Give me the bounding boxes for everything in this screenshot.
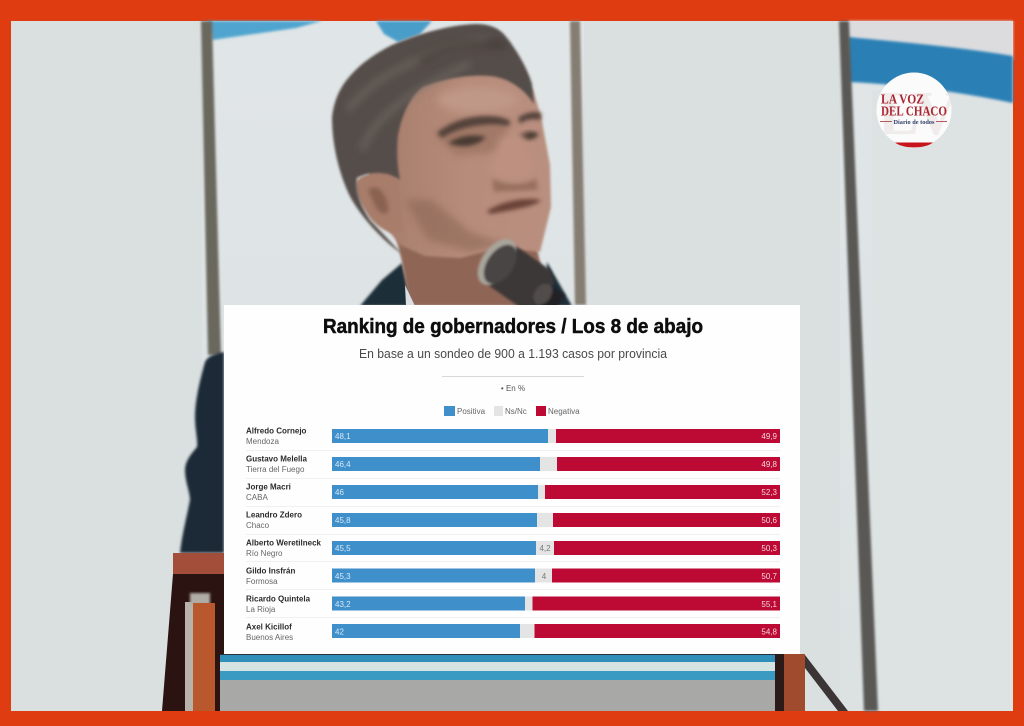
podium left top [173, 553, 224, 574]
row: Alfredo Cornejo: Alfredo Cornejo [246, 426, 307, 436]
eye right [518, 132, 539, 140]
legend: Ns/Nc [505, 407, 527, 416]
chart panel [224, 305, 800, 654]
chart title: Ranking de gobernadores / Los 8 de abajo [323, 316, 703, 338]
eyebrow right [518, 112, 541, 124]
flag fragment top centre [376, 21, 432, 42]
row: Leandro Zdero: 45,8 [335, 516, 351, 525]
row: Gildo Insfrán: 50,7 [761, 572, 778, 581]
nose [490, 132, 536, 180]
row: Ricardo Quintela: 43,2 [335, 600, 351, 609]
podium right side [784, 654, 805, 711]
face [368, 68, 551, 258]
flag pole left [201, 21, 221, 355]
eyebrow left [437, 116, 511, 138]
row: Jorge Macri: 46 [335, 488, 344, 497]
row: Alfredo Cornejo [246, 426, 780, 446]
podium front stripes [220, 654, 776, 711]
collar [405, 285, 415, 306]
legend [444, 406, 580, 416]
row: Alberto Weretilneck: 50,3 [761, 544, 778, 553]
ear inner [368, 187, 388, 214]
mouth [487, 199, 541, 214]
row: Axel Kicillof: Buenos Aires [246, 633, 293, 642]
row: Axel Kicillof: Axel Kicillof [246, 622, 292, 632]
logo disc [876, 72, 952, 148]
logo name: LA VOZ [881, 92, 924, 106]
row: Alberto Weretilneck: Río Negro [246, 549, 283, 558]
row: Gustavo Melella: 49,8 [761, 460, 778, 469]
legend: Positiva [457, 407, 486, 416]
podium light slab [185, 602, 193, 711]
coat shoulders [360, 262, 572, 306]
nostril shadow [492, 178, 538, 192]
row: Alfredo Cornejo: 49,9 [761, 432, 778, 441]
microphone [470, 232, 573, 326]
eye left [448, 135, 486, 146]
panel background [224, 305, 800, 654]
row: Ricardo Quintela: Ricardo Quintela [246, 594, 311, 604]
row: Alberto Weretilneck: 4,2 [539, 544, 551, 553]
logo name second line: DEL CHACO [881, 104, 947, 118]
row: Alberto Weretilneck [246, 538, 780, 558]
flag pole right [839, 21, 878, 711]
row: Ricardo Quintela [246, 594, 780, 614]
row: Jorge Macri [246, 482, 780, 502]
logo watermark: LV [878, 80, 958, 148]
row: Alberto Weretilneck: 45,5 [335, 544, 351, 553]
row: Axel Kicillof: 42 [335, 628, 344, 636]
row: Jorge Macri: CABA [246, 493, 268, 502]
row: Leandro Zdero: Chaco [246, 521, 270, 530]
row: Leandro Zdero [246, 510, 780, 530]
row: Jorge Macri: Jorge Macri [246, 482, 291, 492]
hair highlights [348, 40, 488, 150]
podium [162, 553, 848, 711]
flag pole centre [570, 21, 586, 305]
podium orange slab [193, 603, 215, 711]
row: Gildo Insfrán: Formosa [246, 577, 278, 586]
flag top left [208, 21, 322, 40]
logo rule right [936, 121, 947, 122]
row: Alberto Weretilneck: Alberto Weretilneck [246, 538, 322, 548]
row: Gustavo Melella: 46,4 [335, 460, 351, 469]
flag top right white part [848, 21, 1013, 60]
coat body [180, 352, 224, 553]
logo tagline: Diario de todos [894, 119, 935, 126]
row: Gildo Insfrán: Gildo Insfrán [246, 566, 295, 576]
row: Ricardo Quintela: 55,1 [761, 600, 778, 609]
row: Gustavo Melella [246, 454, 780, 474]
row: Axel Kicillof [246, 622, 780, 642]
row: Alfredo Cornejo: Mendoza [246, 437, 279, 446]
row: Gildo Insfrán: 45,3 [335, 572, 351, 581]
cheek shadow [405, 200, 505, 252]
row: Gildo Insfrán [246, 566, 780, 586]
photo: governor at microphone [180, 24, 573, 553]
unit note: • En % [501, 384, 525, 393]
podium left dark [162, 574, 224, 711]
logo [876, 72, 958, 148]
row: Ricardo Quintela: La Rioja [246, 605, 276, 614]
row: Leandro Zdero: 50,6 [761, 516, 778, 525]
row: Leandro Zdero: Leandro Zdero [246, 510, 302, 520]
mic stand [805, 655, 848, 711]
podium right dark [775, 654, 784, 711]
podium slab cap [190, 593, 210, 605]
logo rule left [880, 121, 892, 122]
row: Jorge Macri: 52,3 [761, 488, 778, 497]
neck [392, 220, 550, 306]
logo red crescent [895, 142, 933, 147]
row: Gildo Insfrán: 4 [542, 572, 547, 581]
ear [356, 174, 404, 233]
hair [332, 24, 534, 254]
eye socket shadow [436, 120, 510, 156]
row: Gustavo Melella: Gustavo Melella [246, 454, 307, 464]
forehead light [438, 87, 518, 113]
chart subtitle: En base a un sondeo de 900 a 1.193 casos por provincia [359, 347, 667, 361]
row: Gustavo Melella: Tierra del Fuego [246, 465, 305, 474]
legend: Negativa [548, 407, 580, 416]
row: Axel Kicillof: 54,8 [761, 628, 778, 636]
row: Alfredo Cornejo: 48,1 [335, 432, 351, 441]
flag top right blue band [848, 37, 1013, 103]
hair dark streak [420, 44, 505, 62]
